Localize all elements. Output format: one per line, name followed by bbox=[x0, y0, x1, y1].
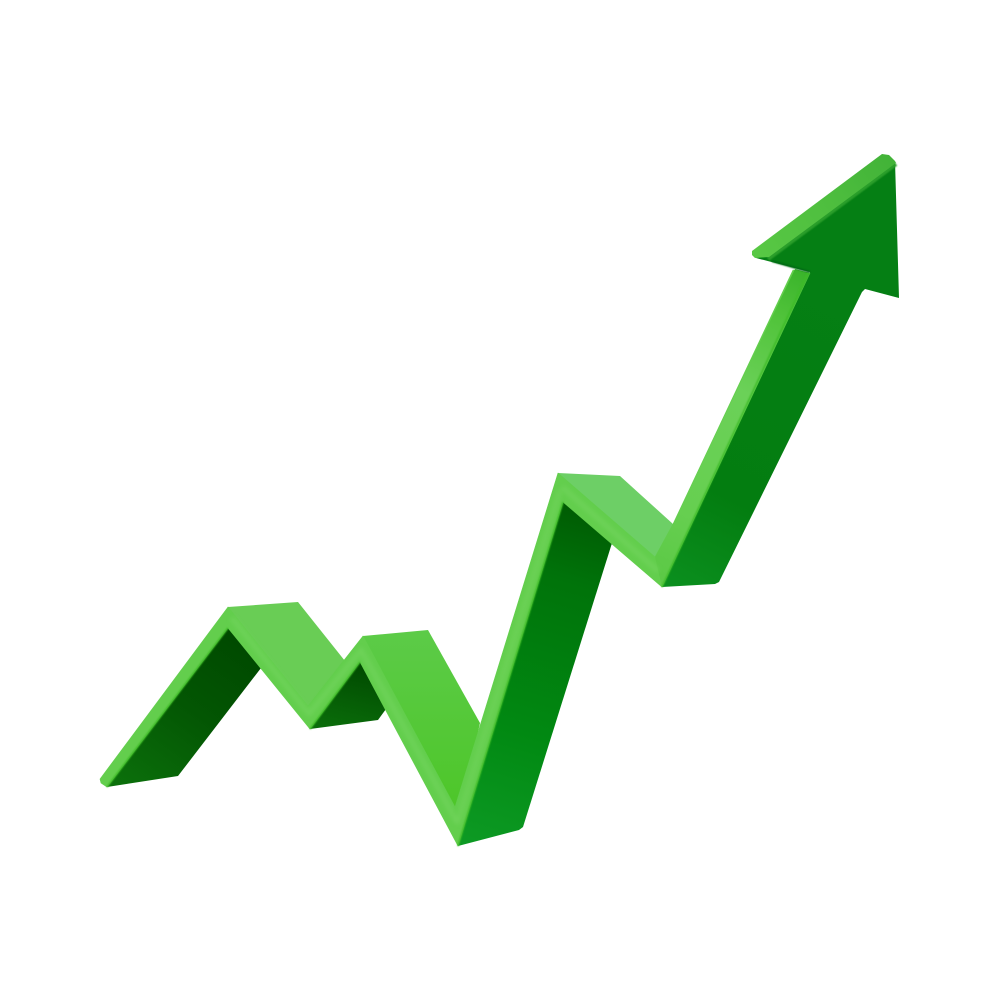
arrow head and final shaft: dark front face bbox=[662, 161, 899, 587]
dark side face: first rising segment bbox=[107, 627, 261, 787]
light top face: third descending segment bbox=[558, 473, 673, 562]
dark side face: second rising segment bbox=[310, 661, 386, 729]
arrow head: dark shadow line at the notch above the shaft bbox=[772, 261, 810, 272]
arrow head: light bevel band bbox=[752, 154, 896, 258]
zigzag front edge strip of the arrow bbox=[100, 269, 810, 846]
final shaft strip shading bbox=[655, 269, 810, 587]
light top face: second descending segment bbox=[363, 630, 480, 815]
saturated crease lines along the dark side faces bbox=[107, 628, 228, 787]
bevel highlight along the descending strips bbox=[232, 618, 457, 822]
light top face: first descending segment bbox=[228, 602, 345, 712]
dark side face: long rising segment bbox=[458, 501, 612, 846]
arrow head: soft shadow under the bevel band bbox=[768, 164, 896, 259]
